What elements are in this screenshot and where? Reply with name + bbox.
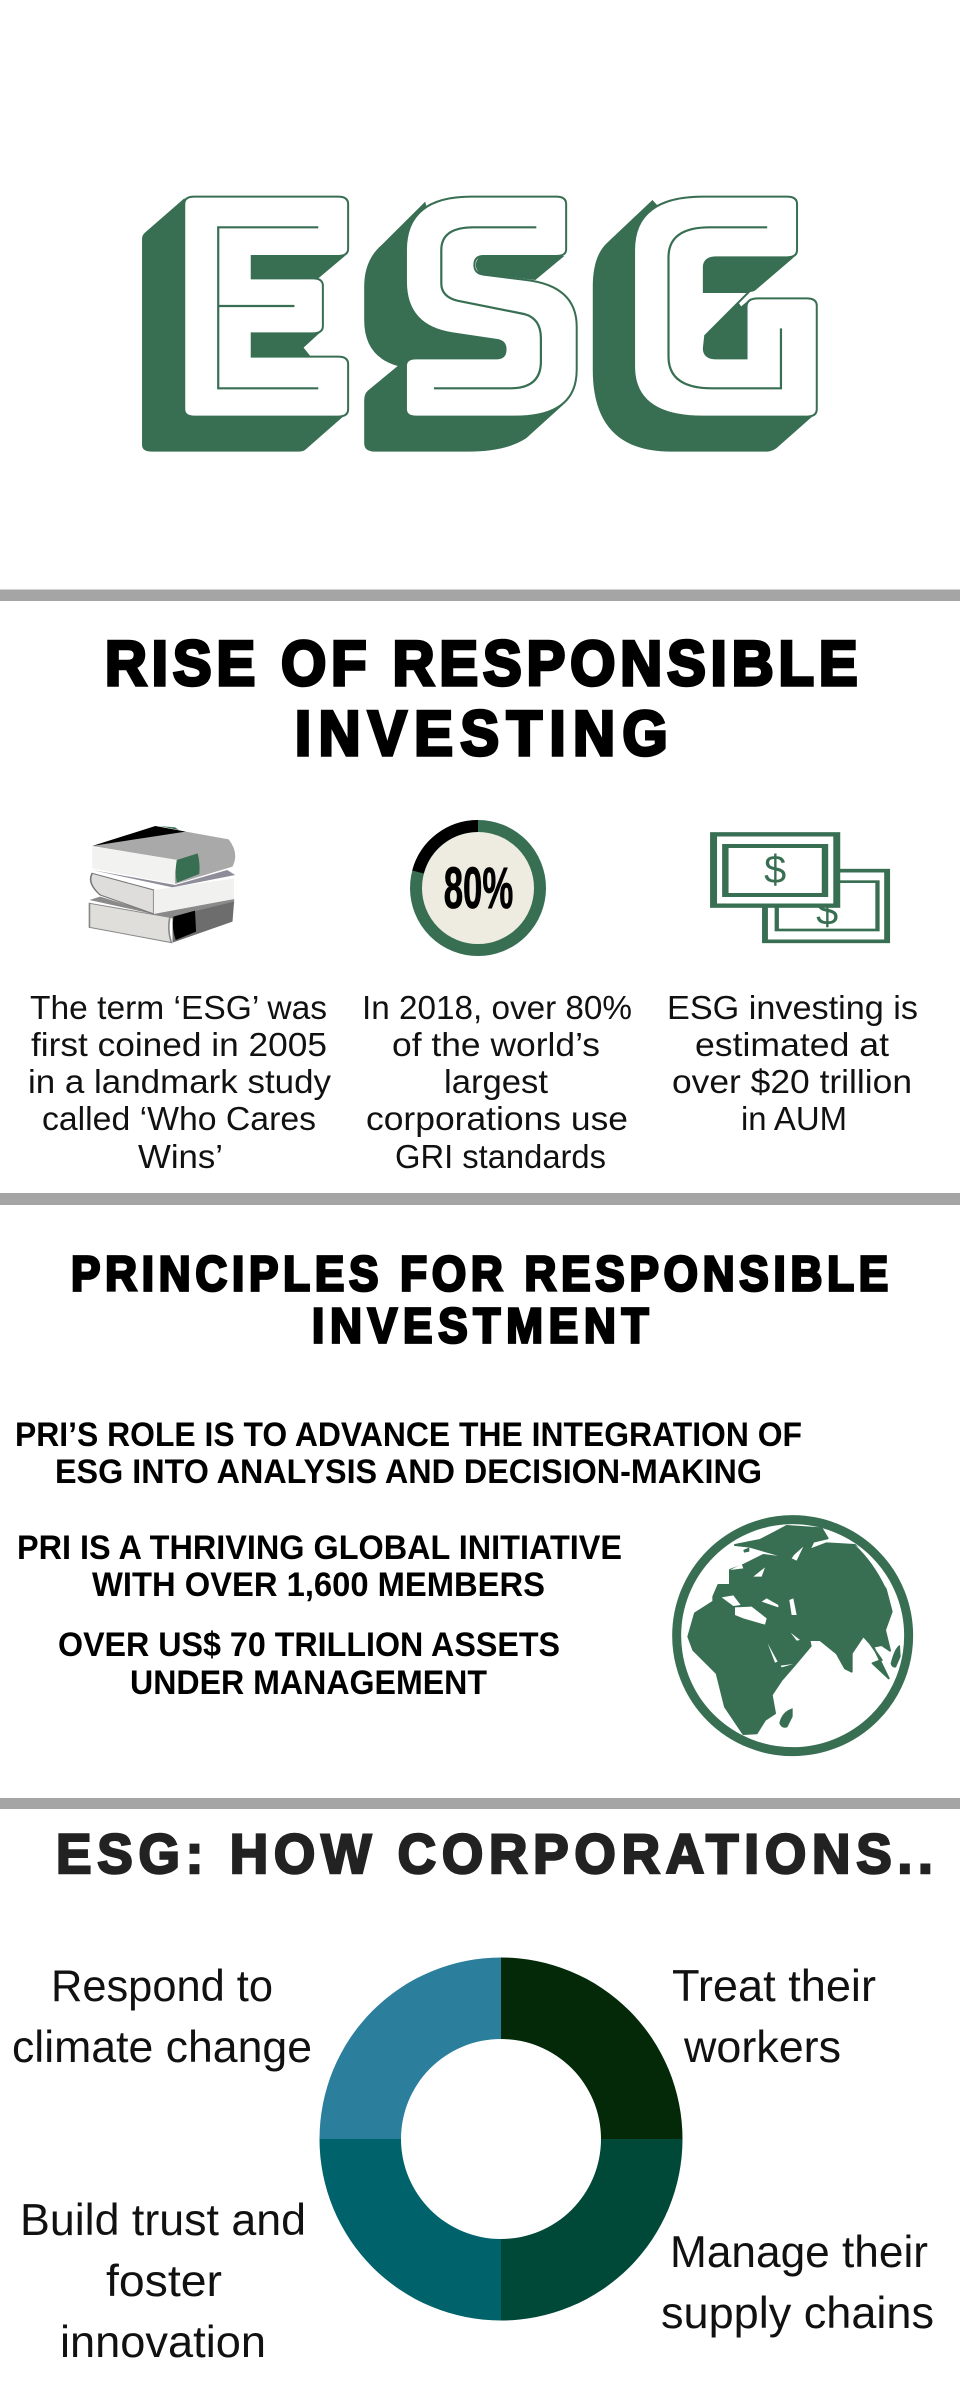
icon: stack of books [89, 826, 235, 943]
text: AUM estimate: over $20 trillion [672, 1064, 912, 1101]
divider [0, 1193, 960, 1205]
label: trust and innovation: innovation [60, 2318, 266, 2367]
icon: banknotes [714, 834, 887, 941]
heading: principles for responsible investment: INVESTMENT [312, 1298, 649, 1353]
text: PRI assets: OVER US$ 70 TRILLION ASSETS [58, 1626, 560, 1664]
text: PRI members: PRI IS A THRIVING GLOBAL INITIATIVE [17, 1529, 622, 1567]
text: term coined: Wins’ [138, 1139, 223, 1176]
text: GRI standards: corporations use [366, 1101, 628, 1138]
text: term coined: The term ‘ESG’ was [30, 990, 327, 1027]
letter G [593, 197, 817, 452]
icon: banknotes: $ [816, 889, 838, 933]
icon: 80 percent ring [416, 826, 540, 950]
text: PRI members [17, 1529, 622, 1604]
text: AUM estimate: in AUM [741, 1101, 847, 1138]
segment: climate change [320, 1958, 501, 2139]
heading: rise of responsible investing: INVESTING [295, 698, 668, 769]
logo: ESG block letters [142, 197, 817, 452]
segment: supply chains [501, 2139, 682, 2320]
text: PRI assets [58, 1626, 560, 1702]
text: AUM estimate: estimated at [695, 1027, 890, 1064]
label: workers [672, 1962, 876, 2072]
heading: rise of responsible investing [105, 628, 858, 769]
text: GRI standards: GRI standards [395, 1139, 606, 1176]
text: PRI members: WITH OVER 1,600 MEMBERS [92, 1566, 545, 1604]
letter E [142, 197, 348, 452]
text: term coined: in a landmark study [28, 1064, 331, 1101]
text: AUM estimate [667, 990, 918, 1138]
label: climate change: climate change [12, 2023, 312, 2072]
text: PRI role: ESG INTO ANALYSIS AND DECISION-MAKING [55, 1453, 762, 1491]
label: supply chains: supply chains [661, 2289, 934, 2338]
text: GRI standards: In 2018, over 80% [362, 990, 632, 1027]
divider [0, 1798, 960, 1809]
text: PRI role [15, 1416, 802, 1491]
label: climate change: Respond to [51, 1962, 273, 2011]
text: term coined: first coined in 2005 [31, 1027, 327, 1064]
text: AUM estimate: ESG investing is [667, 990, 918, 1027]
heading: rise of responsible investing: RISE OF RESPONSIBLE [105, 628, 858, 699]
heading: principles for responsible investment [71, 1246, 888, 1353]
text: GRI standards [362, 990, 632, 1176]
divider [0, 590, 960, 601]
label: supply chains [661, 2228, 934, 2338]
letter S [364, 197, 577, 452]
label: climate change [12, 1962, 312, 2072]
segment: treat workers [501, 1958, 682, 2139]
heading: how corporations: ESG: HOW CORPORATIONS.. [56, 1823, 933, 1885]
label: supply chains: Manage their [670, 2228, 928, 2277]
donut chart [320, 1958, 682, 2320]
label: workers: Treat their [672, 1962, 876, 2011]
segment: trust and innovation [320, 2139, 501, 2320]
icon: banknotes: $ [764, 848, 786, 892]
heading: principles for responsible investment: PRINCIPLES FOR RESPONSIBLE [71, 1246, 888, 1301]
text: GRI standards: of the world’s [392, 1027, 600, 1064]
label: trust and innovation: foster [106, 2257, 222, 2306]
label: trust and innovation [20, 2196, 306, 2367]
value: 80%: 80% [444, 857, 513, 921]
text: term coined: called ‘Who Cares [42, 1101, 316, 1138]
text: PRI role: PRI’S ROLE IS TO ADVANCE THE INTEGRATION OF [15, 1416, 802, 1454]
text: GRI standards: largest [444, 1064, 549, 1101]
label: workers: workers [683, 2023, 841, 2072]
icon: globe [677, 1520, 909, 1752]
label: trust and innovation: Build trust and [20, 2196, 306, 2245]
text: PRI assets: UNDER MANAGEMENT [130, 1664, 487, 1702]
text: term coined [28, 990, 331, 1176]
